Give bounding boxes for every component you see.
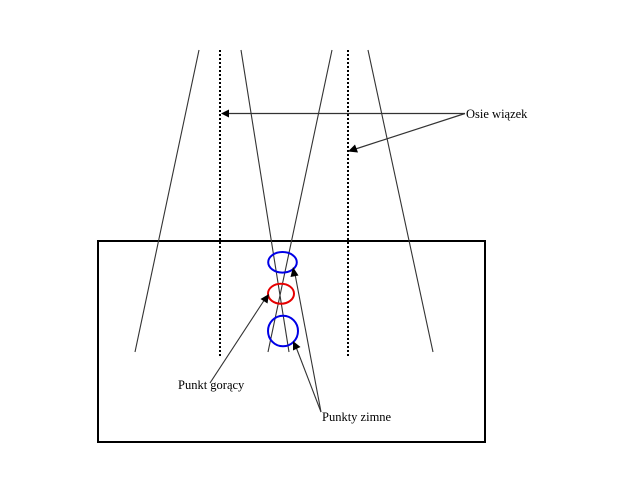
beam edge lines (135, 50, 433, 352)
arrow: axis 1 (221, 110, 465, 118)
hot spot (268, 284, 294, 304)
label: cold spots: Punkty zimne (322, 410, 392, 424)
arrow: cold spot bottom (293, 341, 321, 412)
label: beam axes: Osie wiązek (466, 107, 528, 121)
cold spot: top (268, 252, 297, 273)
panel: body rectangle (98, 241, 485, 442)
arrow: hot spot (210, 294, 269, 383)
arrow: cold spot top (290, 267, 321, 412)
cold spot: bottom (268, 316, 298, 346)
beam axes (220, 50, 348, 356)
label: hot spot: Punkt gorący (178, 378, 245, 392)
arrow: axis 2 (348, 114, 465, 152)
